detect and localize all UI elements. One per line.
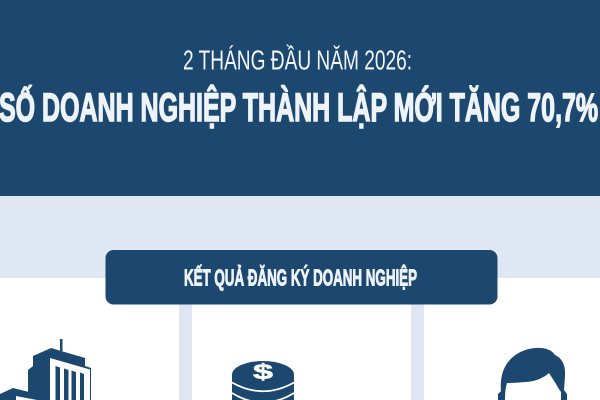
subtitle: 2 THÁNG ĐẦU NĂM 2026: <box>183 44 412 75</box>
panel: light band <box>0 196 600 278</box>
connector strip right <box>411 300 424 400</box>
icon: coin stack <box>232 361 294 400</box>
dollar sign: $ <box>253 361 274 384</box>
title: SỐ DOANH NGHIỆP THÀNH LẬP MỚI TĂNG 70,7% <box>0 84 598 131</box>
panel: header band <box>0 0 600 196</box>
section heading text: KẾT QUẢ ĐĂNG KÝ DOANH NGHIỆP <box>184 265 417 292</box>
connector strip left <box>179 300 192 400</box>
icon: person head <box>498 348 567 400</box>
section heading box <box>106 250 498 304</box>
icon: office buildings <box>0 339 91 400</box>
